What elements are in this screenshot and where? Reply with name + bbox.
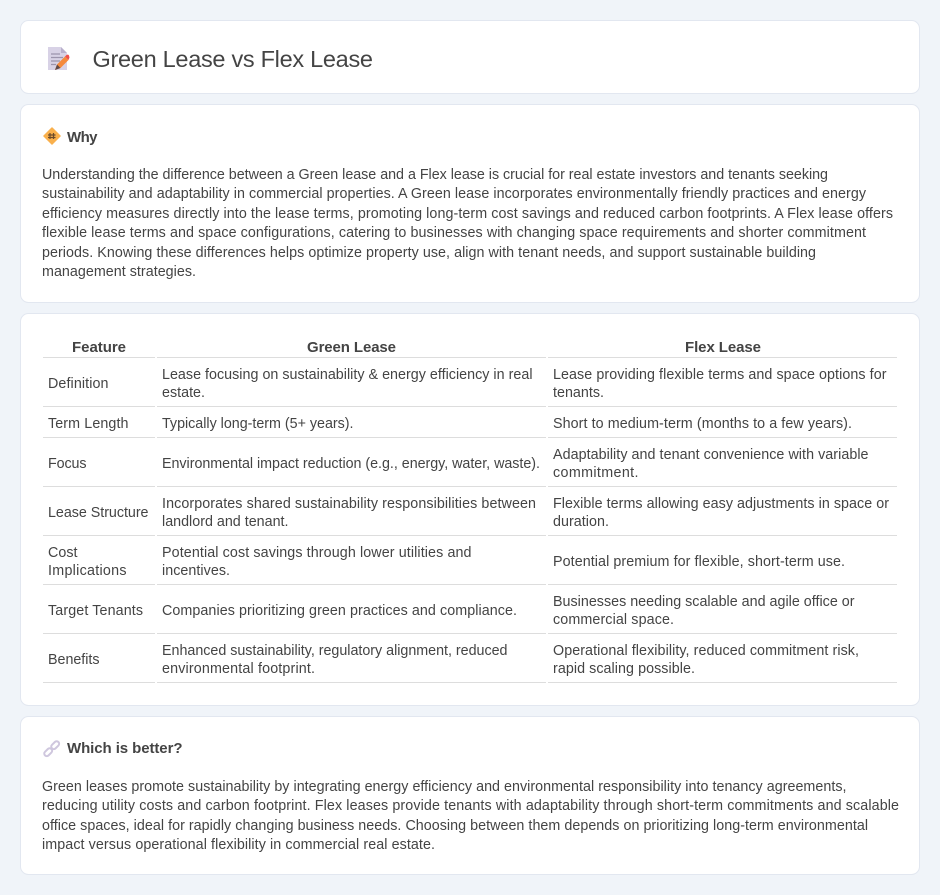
- table row: focus: Environmental impact reduction (e.g., energy, water, waste).: [162, 456, 540, 472]
- table row: term length: Term Length: [48, 416, 129, 432]
- text block: why paragraph: Understanding the difference between a Green lease and a Flex lease is crucial for real estate investors and tenants seeking: [42, 167, 828, 183]
- table row: benefits: Operational flexibility, reduced commitment risk,: [553, 643, 859, 659]
- table row: focus: Adaptability and tenant convenience with variable: [553, 447, 869, 463]
- table row: target tenants: Target Tenants: [48, 603, 143, 619]
- table row: cost implications: incentives.: [162, 563, 230, 579]
- text block: why paragraph: efficiency measures directly into the lease terms, promoting long-term cost savings and reduced carbon footprints. A Flex lease offers: [42, 206, 893, 222]
- table row: lease structure: landlord and tenant.: [162, 514, 288, 530]
- table row: target tenants: Businesses needing scalable and agile office or: [553, 594, 855, 610]
- table row: target tenants: Companies prioritizing green practices and compliance.: [162, 603, 517, 619]
- table row: term length: Short to medium-term (months to a few years).: [553, 416, 852, 432]
- table row: benefits: environmental footprint.: [162, 661, 315, 677]
- title: Green Lease vs Flex Lease: [92, 46, 373, 72]
- table row: lease structure: Flexible terms allowing easy adjustments in space or: [553, 496, 889, 512]
- icon: orange diamond: [44, 128, 60, 144]
- table row: definition: Lease providing flexible terms and space options for: [553, 367, 887, 383]
- text block: which is better paragraph: [42, 779, 899, 853]
- table row: cost implications: Cost: [48, 545, 78, 561]
- table row: benefits: rapid scaling possible.: [553, 661, 695, 677]
- table row: definition: tenants.: [553, 385, 604, 401]
- table row: term length: [48, 416, 852, 432]
- table row: benefits: [48, 643, 859, 677]
- table row: definition: Lease focusing on sustainability & energy efficiency in real: [162, 367, 532, 383]
- table row: cost implications: Implications: [48, 563, 126, 579]
- table row: lease structure: [48, 496, 889, 530]
- table header row: Green Lease: [307, 339, 396, 356]
- panel: title header: [20, 20, 920, 94]
- panel: comparison table: [20, 314, 920, 706]
- panel: which is better: [20, 716, 920, 874]
- table row: target tenants: commercial space.: [553, 612, 674, 628]
- table row: benefits: Enhanced sustainability, regulatory alignment, reduced: [162, 643, 508, 659]
- table row: focus: [48, 447, 869, 481]
- table header row: Flex Lease: [685, 339, 761, 356]
- table row: cost implications: Potential premium for flexible, short-term use.: [553, 554, 845, 570]
- text block: which is better paragraph: Green leases promote sustainability by integrating energy efficiency and environmental responsibility into tenancy agreements,: [42, 779, 846, 795]
- table row: definition: estate.: [162, 385, 205, 401]
- table header row: Feature: [72, 339, 126, 356]
- icon: chain link: [43, 740, 60, 757]
- text block: which is better paragraph: impact versus operational flexibility in commercial real estate.: [42, 837, 435, 853]
- table row: lease structure: Incorporates shared sustainability responsibilities between: [162, 496, 536, 512]
- panel: why: [20, 104, 920, 302]
- table row: lease structure: Lease Structure: [48, 505, 149, 521]
- text block: why paragraph: management strategies.: [42, 264, 196, 280]
- text block: why paragraph: flexible lease terms and space configurations, catering to businesses with changing space requirements and shorter commitment: [42, 225, 866, 241]
- text block: why paragraph: periods. Knowing these differences helps optimize property use, align with tenant needs, and support sustainable building: [42, 245, 816, 261]
- table row: definition: Definition: [48, 376, 109, 392]
- text block: which is better paragraph: office spaces, ideal for rapidly changing business needs. Choosing between them depends on prioritizing long-term environmental: [42, 818, 868, 834]
- text block: why paragraph: sustainability and adaptability in commercial properties. A Green lease incorporates environmentally friendly practices and energy: [42, 186, 867, 202]
- table row: benefits: Benefits: [48, 652, 100, 668]
- heading: which is better: Which is better?: [67, 740, 182, 757]
- table row: lease structure: duration.: [553, 514, 609, 530]
- heading: why: Why: [67, 129, 98, 146]
- table row: cost implications: [48, 545, 845, 579]
- text block: which is better paragraph: reducing utility costs and carbon footprint. Flex leases provide tenants with adaptability through short-term commitments and scalable: [42, 798, 899, 814]
- icon: document with pencil: [48, 47, 70, 70]
- table row: target tenants: [48, 594, 855, 628]
- text block: why paragraph: [42, 167, 893, 280]
- table row: term length: Typically long-term (5+ years).: [162, 416, 354, 432]
- table row: focus: commitment.: [553, 465, 638, 481]
- table row: cost implications: Potential cost savings through lower utilities and: [162, 545, 472, 561]
- table row: definition: [48, 367, 887, 401]
- table header row: [72, 339, 761, 356]
- table row: focus: Focus: [48, 456, 86, 472]
